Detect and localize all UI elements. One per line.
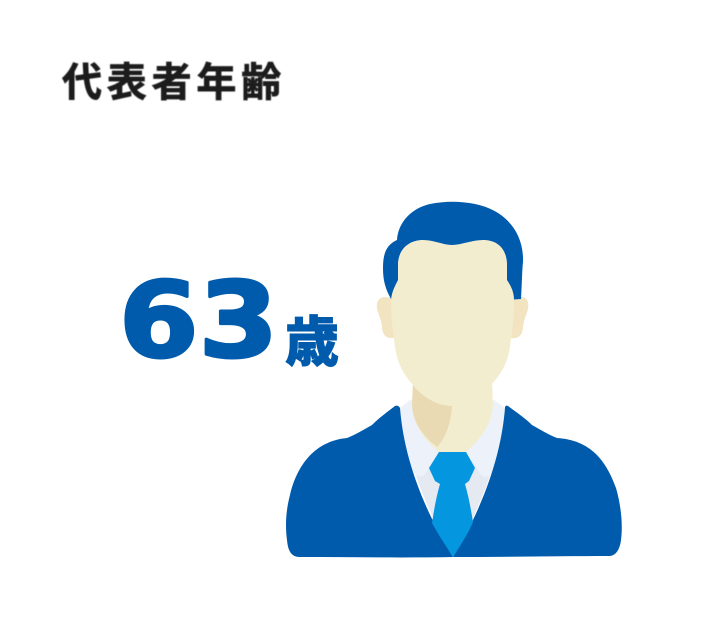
collar bbox=[400, 400, 505, 477]
face bbox=[391, 240, 514, 406]
number: 63: 63 bbox=[119, 260, 278, 381]
title: 代表者年齢 bbox=[62, 61, 286, 105]
neck bbox=[412, 380, 493, 452]
icon: businessman bbox=[286, 202, 622, 557]
neck shadow bbox=[412, 385, 452, 447]
age value bbox=[119, 260, 339, 381]
jacket left bbox=[286, 406, 453, 557]
right ear bbox=[511, 297, 528, 338]
necktie bbox=[429, 452, 475, 557]
jacket shirt bbox=[400, 400, 505, 557]
hair bbox=[383, 202, 523, 300]
unit: years old: 歳 bbox=[285, 313, 339, 373]
left ear bbox=[377, 297, 394, 338]
jacket right bbox=[453, 406, 622, 557]
